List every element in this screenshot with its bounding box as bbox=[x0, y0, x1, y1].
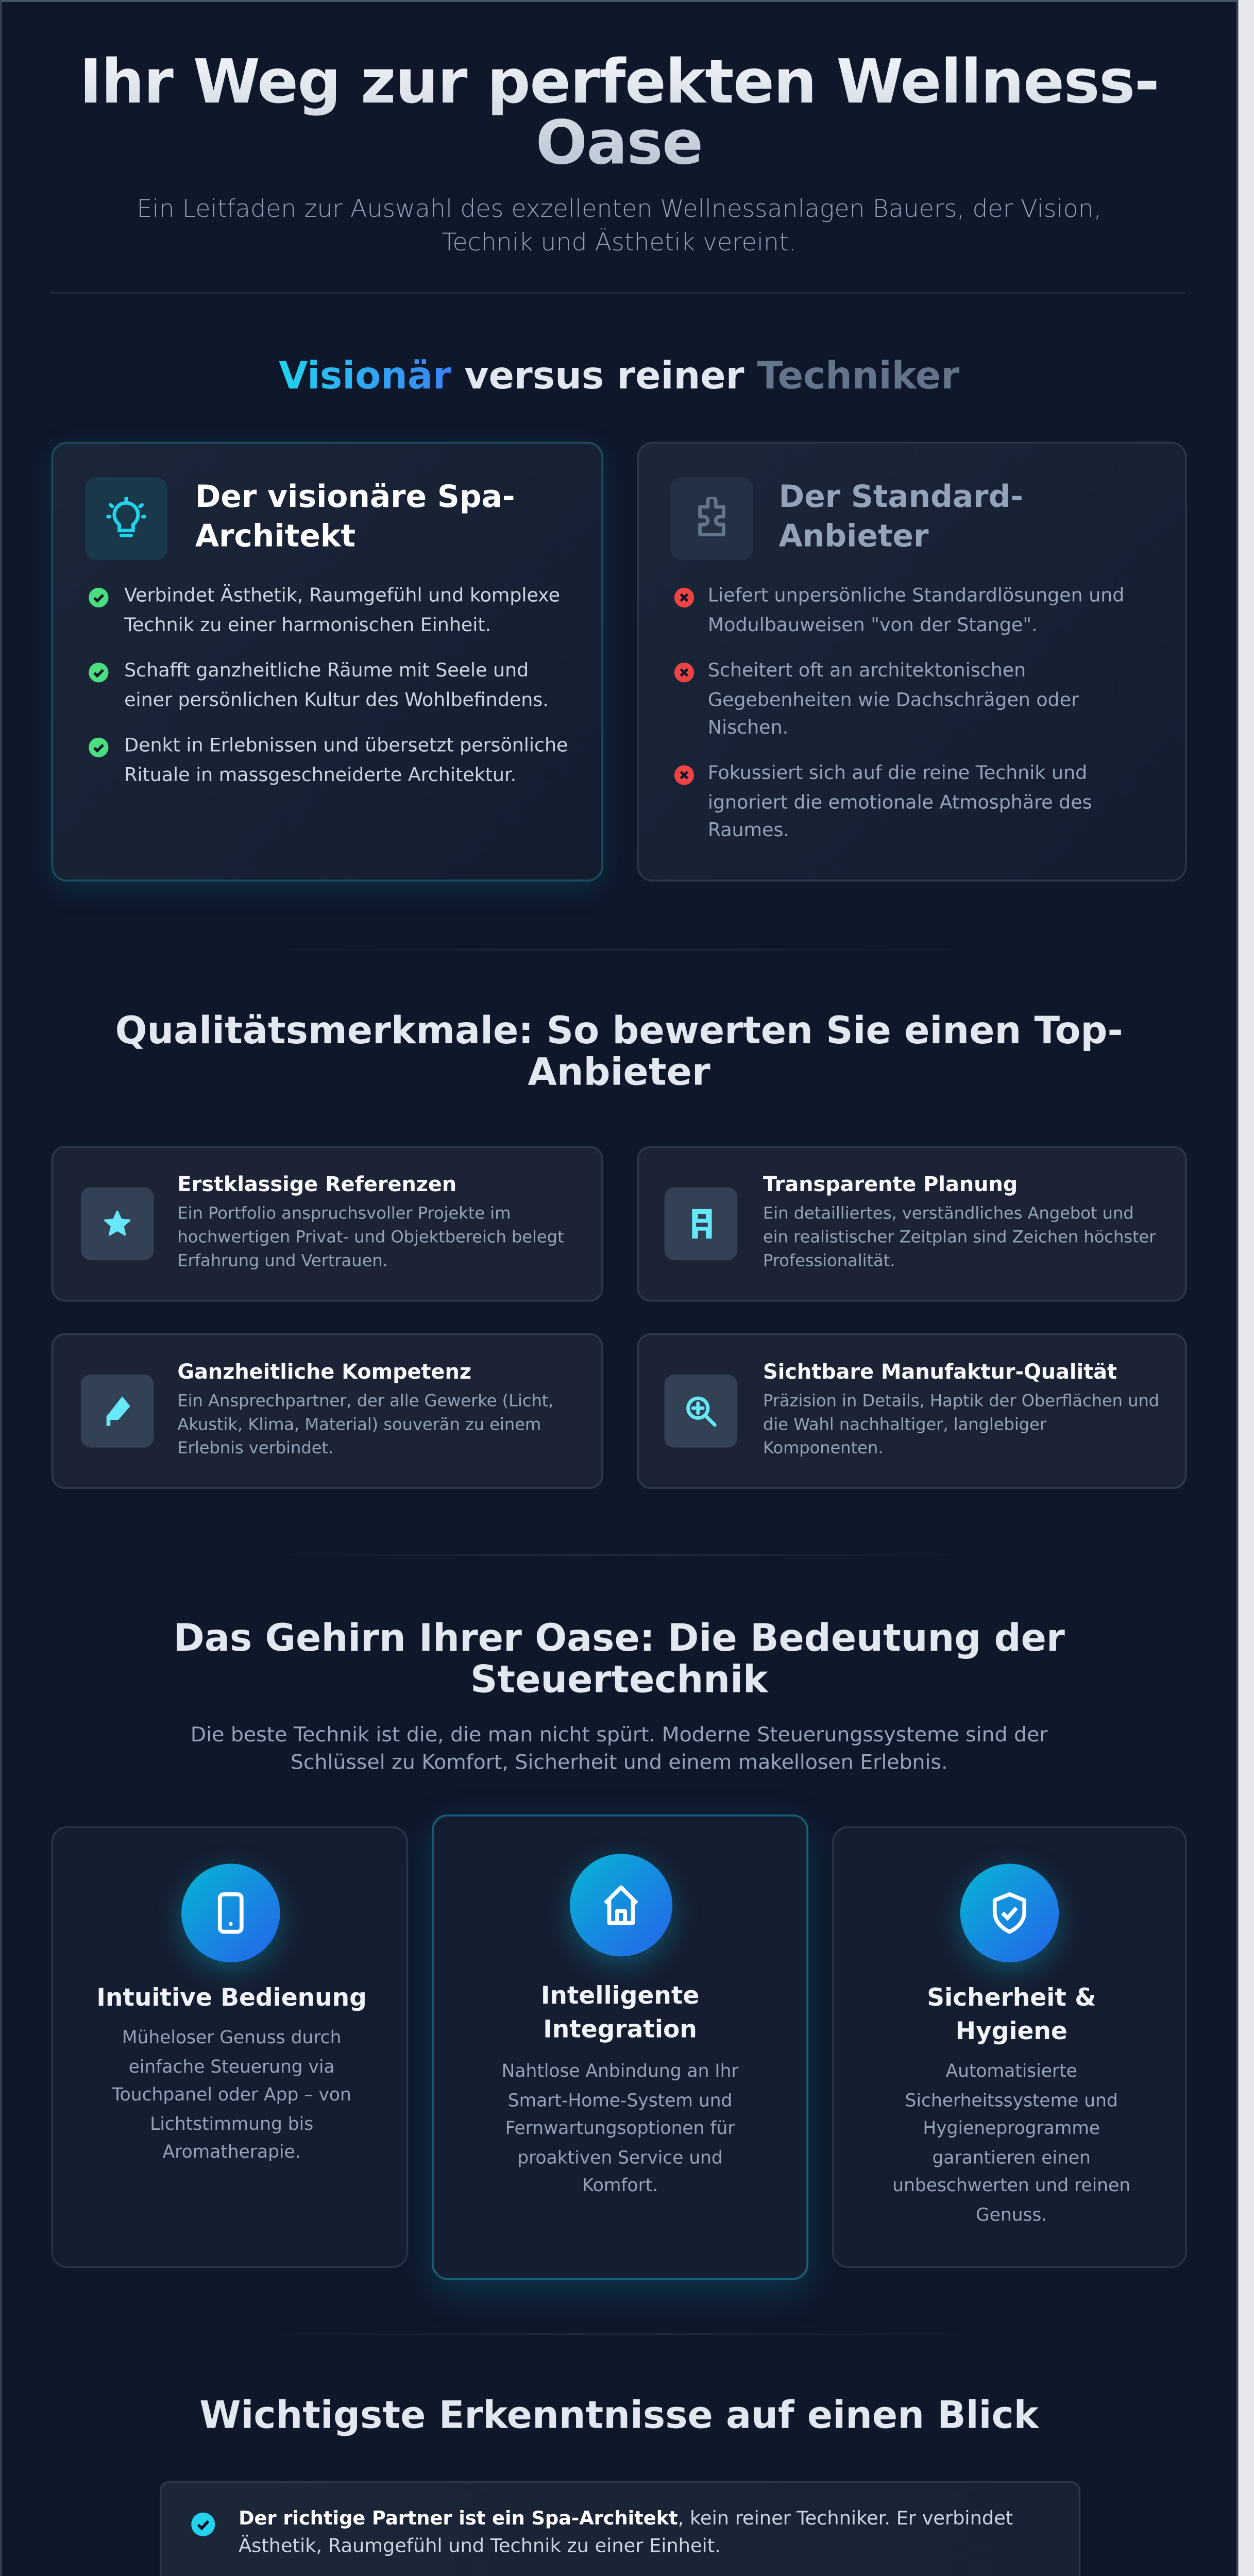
icon: star bbox=[81, 1187, 154, 1260]
panel: transparent planning: ein realistischer Zeitplan sind Zeichen höchster bbox=[763, 1227, 1156, 1246]
takeaway 1: Der richtige Partner ist ein Spa-Architekt, kein reiner Techniker. Er verbindet Ästhetik, Raumgefühl und Technik zu einer Einheit. bbox=[239, 2509, 1013, 2558]
panel: transparent planning: Ein detailliertes, verständliches Angebot und bbox=[763, 1203, 1134, 1223]
card title bbox=[195, 479, 515, 553]
panel: manufacture quality: Sichtbare Manufaktur-Qualität bbox=[763, 1361, 1117, 1384]
panel: transparent planning bbox=[637, 1146, 1187, 1301]
panel: visionary: Verbindet Ästhetik, Raumgefühl und komplexe Technik zu einer harmonischen Einheit. bbox=[124, 586, 560, 636]
panel: manufacture quality bbox=[637, 1333, 1187, 1489]
panel: visionary: Denkt in Erlebnissen und übersetzt persönliche Rituale in massgeschneiderte Architektur. bbox=[124, 736, 568, 786]
heading: quality: Qualitätsmerkmale: So bewerten Sie einen Top-Anbieter bbox=[115, 1010, 1123, 1095]
panel: intuitive control: Müheloser Genuss durch einfache Steuerung via Touchpanel oder App – von Lichtstimmung bis Aromatherapie. bbox=[112, 2029, 351, 2164]
panel: references bbox=[52, 1146, 603, 1301]
panel: holistic competence: Ganzheitliche Kompetenz bbox=[177, 1361, 471, 1384]
icon: shield bbox=[960, 1863, 1059, 1962]
panel: transparent planning: Transparente Planung bbox=[763, 1174, 1018, 1197]
panel: references: hochwertigen Privat- und Objektbereich belegt bbox=[177, 1227, 564, 1246]
icon: building bbox=[665, 1187, 737, 1260]
panel: safety hygiene: Hygiene bbox=[956, 2018, 1067, 2045]
icon: puzzle bbox=[670, 477, 753, 560]
panel: manufacture quality: Komponenten. bbox=[763, 1438, 883, 1458]
panel: transparent planning: Professionalität. bbox=[763, 1250, 895, 1270]
panel: references: Erstklassige Referenzen bbox=[177, 1174, 456, 1197]
panel: intelligent integration: Nahtlose Anbindung an Ihr Smart-Home-System und Fernwartungsoptionen für proaktiven Service und Komfort. bbox=[502, 2063, 739, 2198]
panel: standard provider: Fokussiert sich auf die reine Technik und ignoriert die emotionale Atmosphäre des Raumes. bbox=[708, 763, 1092, 842]
card title: Anbieter bbox=[779, 518, 928, 553]
panel: references: Erfahrung und Vertrauen. bbox=[177, 1250, 388, 1270]
panel: intelligent integration bbox=[432, 1815, 808, 2280]
panel: standard provider: Liefert unpersönliche Standardlösungen und Modulbauweisen "von der Stange". bbox=[708, 586, 1124, 636]
panel: intelligent integration: Intelligente bbox=[541, 1982, 699, 2010]
heading: takeaways: Wichtigste Erkenntnisse auf einen Blick bbox=[199, 2394, 1039, 2437]
panel: visionary: Schafft ganzheitliche Räume mit Seele und einer persönlichen Kultur des Wohlbefindens. bbox=[124, 660, 549, 711]
takeaway 1 bbox=[160, 2481, 1080, 2576]
steuertechnik subtitle: Die beste Technik ist die, die man nicht spürt. Moderne Steuerungssysteme sind der Schlüssel zu Komfort, Sicherheit und einem makellosen Erlebnis. bbox=[191, 1724, 1048, 1775]
card title: Der Standard- bbox=[779, 479, 1023, 515]
panel: standard provider: Scheitert oft an architektonischen Gegebenheiten wie Dachschrägen oder Nischen. bbox=[708, 660, 1079, 740]
panel: holistic competence: Akustik, Klima, Material) souverän zu einem bbox=[177, 1414, 541, 1434]
panel: safety hygiene bbox=[832, 1826, 1187, 2268]
icon: magnifier bbox=[665, 1375, 737, 1448]
panel: visionary bbox=[52, 442, 603, 882]
icon: house bbox=[570, 1854, 672, 1956]
heading: steuertechnik: Das Gehirn Ihrer Oase: Die Bedeutung der Steuertechnik bbox=[173, 1617, 1065, 1702]
panel: intelligent integration: Integration bbox=[543, 2015, 697, 2043]
panel: safety hygiene: Sicherheit & bbox=[927, 1984, 1096, 2012]
card title: Der visionäre Spa- bbox=[195, 479, 515, 515]
bullet list bbox=[674, 586, 1124, 842]
panel: manufacture quality: die Wahl nachhaltiger, langlebiger bbox=[763, 1414, 1046, 1434]
icon: paint brush bbox=[81, 1375, 154, 1448]
panel: references: Ein Portfolio anspruchsvoller Projekte im bbox=[177, 1203, 511, 1223]
card title bbox=[779, 479, 1023, 553]
bullet list bbox=[89, 584, 568, 786]
panel: holistic competence: Ein Ansprechpartner, der alle Gewerke (Licht, bbox=[177, 1391, 554, 1410]
panel: holistic competence: Erlebnis verbindet. bbox=[177, 1438, 333, 1458]
panel: intuitive control: Intuitive Bedienung bbox=[96, 1984, 367, 2012]
subtitle: Ein Leitfaden zur Auswahl des exzellenten Wellnessanlagen Bauers, der Vision, Technik und Ästhetik vereint. bbox=[137, 193, 1102, 257]
title: Ihr Weg zur perfekten Wellness- bbox=[79, 47, 1159, 118]
panel: intuitive control bbox=[52, 1826, 408, 2268]
card title: Architekt bbox=[195, 518, 355, 553]
title bbox=[12, 53, 1226, 176]
panel: manufacture quality: Präzision in Details, Haptik der Oberflächen und bbox=[763, 1391, 1159, 1410]
icon: phone bbox=[181, 1863, 280, 1962]
panel: standard provider bbox=[637, 442, 1187, 882]
heading: visionär vs techniker: Visionär versus reiner Techniker bbox=[279, 355, 959, 398]
panel: holistic competence bbox=[52, 1333, 603, 1489]
panel: safety hygiene: Automatisierte Sicherheitssysteme und Hygieneprogramme garantieren einen unbeschwerten und reinen Genuss. bbox=[892, 2063, 1130, 2227]
title: Oase bbox=[536, 109, 703, 179]
icon: lightbulb bbox=[85, 477, 167, 560]
